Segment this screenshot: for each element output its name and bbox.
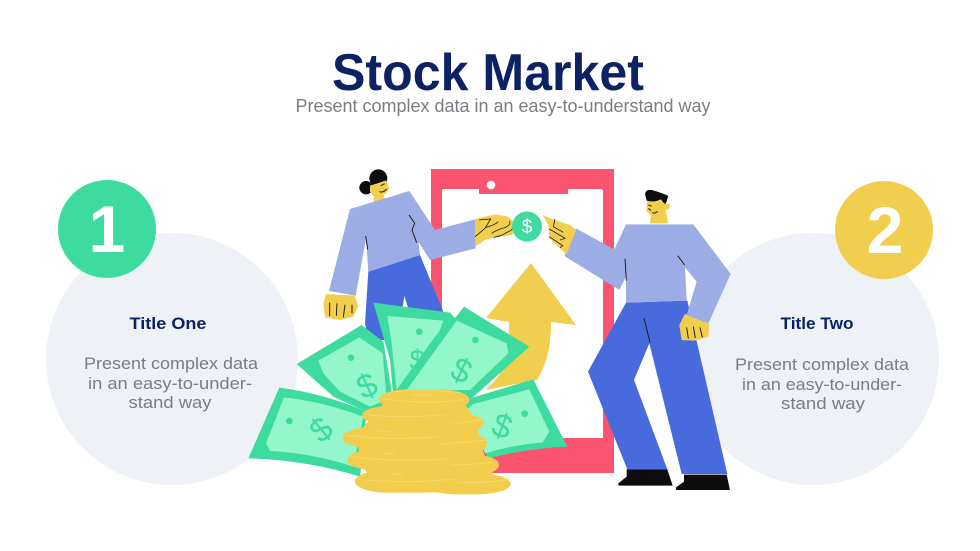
panel: left card <box>46 180 298 485</box>
bill: right: $ <box>487 406 517 447</box>
text block: right description: in an easy-to-under- <box>742 375 902 394</box>
bill: upper right <box>398 307 529 403</box>
text block: left description: stand way <box>128 393 212 412</box>
subtitle: Present complex data in an easy-to-understand way <box>296 96 710 116</box>
bill: right <box>460 379 567 458</box>
illustration: woman <box>323 169 513 340</box>
woman head <box>359 169 389 207</box>
arrow: rising yellow arrow <box>485 263 576 390</box>
title: Stock Market <box>332 44 644 102</box>
badge: number 2: 2 <box>867 193 903 267</box>
man fist <box>543 215 576 254</box>
bill: upper left: $ <box>351 366 383 407</box>
panel: right card <box>687 181 939 485</box>
illustration: money <box>248 303 567 477</box>
man head <box>645 190 670 223</box>
heading: title one: Title One <box>130 314 206 333</box>
badge: number 1: 1 <box>89 192 125 266</box>
man body <box>564 224 731 490</box>
bill: upper right: $ <box>445 350 477 392</box>
bill: top centre <box>373 303 457 397</box>
badge: number 1 <box>58 180 156 278</box>
badge: number 2 <box>835 181 933 279</box>
illustration: man <box>543 190 731 490</box>
text block: left description <box>84 354 259 412</box>
heading: title two: Title Two <box>780 314 854 333</box>
text block: right description: stand way <box>781 394 866 413</box>
text block: left description: in an easy-to-under- <box>88 374 252 393</box>
woman body <box>323 191 476 340</box>
text block: left description: Present complex data <box>84 354 259 373</box>
text block: right description: Present complex data <box>735 355 910 374</box>
bill: upper left <box>297 325 393 413</box>
icon: phone <box>431 169 614 473</box>
icon: dollar coin: $ <box>522 217 533 238</box>
bill: left: $ <box>303 410 341 450</box>
icon: dollar coin <box>512 212 542 242</box>
text block: right description <box>735 355 910 413</box>
bill: left <box>248 388 367 477</box>
illustration: coin stack <box>343 389 511 494</box>
woman hand <box>475 214 513 247</box>
bill: top centre: $ <box>409 345 425 377</box>
